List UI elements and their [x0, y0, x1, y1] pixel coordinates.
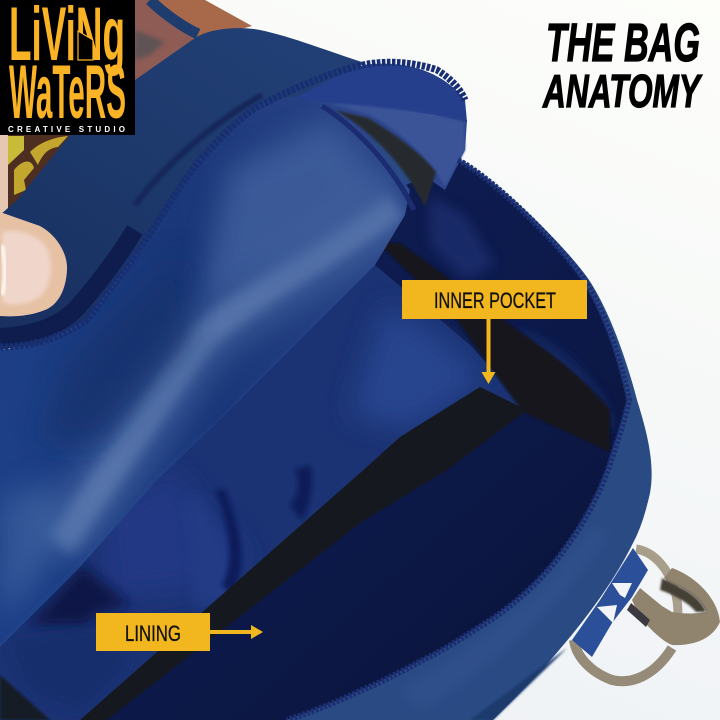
- logo: [0, 0, 135, 135]
- back wall right: [520, 330, 615, 430]
- finger side: [0, 130, 10, 225]
- pillowed lining: [0, 265, 525, 720]
- elastic band: [80, 387, 527, 720]
- dark seam above flap zipper: [135, 95, 262, 205]
- lining fold shadow right: [290, 465, 312, 520]
- broad band glow: [60, 205, 395, 545]
- callout: inner pocket: [402, 280, 587, 384]
- strap white stripes: [597, 583, 632, 623]
- left dark shade: [40, 250, 190, 440]
- interior shading: [430, 195, 615, 430]
- flap canvas: [0, 28, 365, 350]
- lining dark wedge: [30, 565, 130, 625]
- back wall fold: [430, 195, 495, 280]
- dark band under flap zipper: [0, 230, 135, 337]
- clasp inner shadow: [660, 578, 706, 612]
- callout: lining: [96, 613, 263, 651]
- bag body: [0, 100, 652, 720]
- callout: lining: LINING: [125, 621, 181, 646]
- title: [542, 13, 703, 117]
- flap mesh edge: [335, 110, 436, 207]
- printed fabric behind hand: [8, 135, 72, 215]
- upper ring: [636, 549, 678, 625]
- lining piping: [322, 106, 414, 210]
- skin at top: [130, 0, 252, 90]
- callout: inner pocket: INNER POCKET: [434, 288, 556, 313]
- bottom left mesh: [0, 675, 50, 720]
- lower left puff: [10, 630, 130, 710]
- photo and annotation canvas: WaTeRS: [9, 50, 126, 135]
- flap cuff underlay: [295, 98, 467, 190]
- lining fold shadow: [215, 490, 242, 595]
- logo tagline: CREATIVE STUDIO: [8, 125, 125, 134]
- finger: [0, 212, 67, 316]
- lining bottom edge: [170, 426, 213, 468]
- strap rope: [572, 548, 648, 657]
- flap lining shading: [0, 120, 395, 655]
- canvas highlight: [400, 530, 610, 712]
- swivel clasp: [632, 568, 720, 645]
- inner mesh pocket band: [378, 243, 610, 452]
- flap zipper: [0, 62, 465, 347]
- logo house icon: [78, 31, 93, 60]
- carry strap: [150, 0, 198, 34]
- lower left glow: [0, 482, 60, 604]
- clasp dark bar: [627, 603, 650, 627]
- upper pale panel: [198, 122, 384, 292]
- zipper roll: [295, 64, 467, 122]
- hardware: [572, 548, 720, 681]
- lower d-ring: [574, 640, 672, 681]
- satin cuff: [330, 103, 465, 186]
- light band along edge: [60, 205, 395, 545]
- interior lower pocket: [0, 162, 627, 720]
- bottom seam fold: [470, 648, 567, 720]
- back zipper rim: [287, 160, 629, 720]
- flap lining: [0, 97, 410, 647]
